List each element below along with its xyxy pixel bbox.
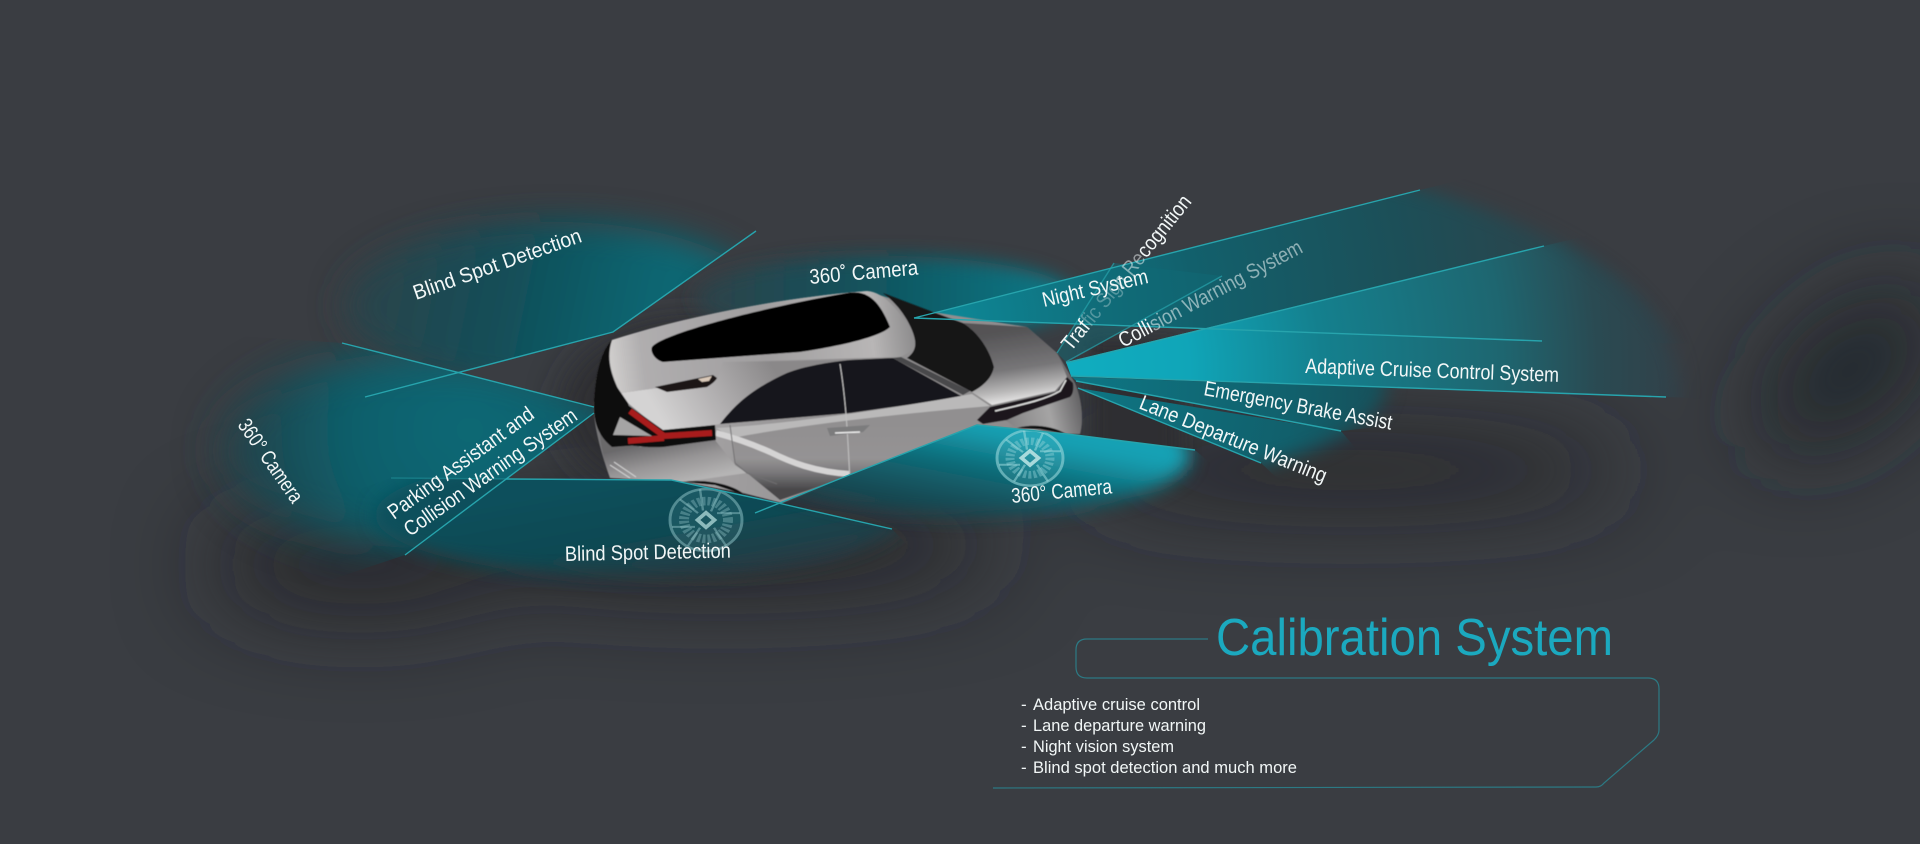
item: lane departure warning: - bbox=[1021, 716, 1027, 735]
item text: adaptive cruise control: Adaptive cruise control bbox=[1033, 695, 1200, 714]
tread ring bbox=[1010, 441, 1050, 475]
wheel disc bbox=[996, 429, 1064, 487]
tail light surround bbox=[608, 403, 716, 447]
front ground shadow bbox=[1090, 340, 1180, 470]
front fender bbox=[1005, 383, 1082, 434]
dark ground under car bbox=[560, 320, 820, 500]
beam: night system bbox=[938, 188, 1556, 328]
label: collision warning rear: Collision Warning System bbox=[400, 404, 582, 541]
label: 360 camera front: 360° Camera bbox=[1010, 475, 1113, 508]
rear dark edge bbox=[594, 340, 640, 447]
car body bbox=[594, 291, 1082, 503]
beam: lower blind spot detection bbox=[377, 478, 896, 584]
roof pillar strip bbox=[893, 357, 970, 395]
headlight highlight bbox=[995, 380, 1066, 411]
beam: lane departure warning bbox=[1081, 388, 1348, 472]
rear wheel arch bbox=[683, 481, 745, 495]
door line bbox=[840, 364, 850, 482]
feature list bbox=[1021, 695, 1297, 777]
beam: right 360 camera bbox=[782, 426, 1201, 526]
spoiler highlight bbox=[698, 376, 712, 382]
item: night vision system: - bbox=[1021, 737, 1027, 756]
beam: traffic sign recognition bbox=[1058, 263, 1129, 362]
hood bbox=[963, 323, 1067, 405]
windscreen bbox=[883, 293, 994, 392]
label: blind spot detection upper: Blind Spot Detection bbox=[410, 225, 585, 305]
label: 360 camera rear: 360° Camera bbox=[233, 415, 308, 508]
title: Calibration System bbox=[1216, 609, 1613, 667]
rim bbox=[670, 489, 742, 551]
front wheel bbox=[996, 429, 1064, 487]
sill highlight bbox=[716, 394, 990, 438]
rear bumper bbox=[600, 432, 747, 482]
item text: night vision system: Night vision system bbox=[1033, 737, 1174, 756]
rear window bbox=[652, 292, 890, 362]
roof and hatch panel bbox=[610, 291, 915, 393]
calibration frame bbox=[993, 639, 1659, 788]
background shadows bbox=[210, 261, 1920, 610]
side windows bbox=[720, 358, 963, 424]
door panel bbox=[733, 405, 985, 500]
label: 360 camera top: 360˚ Camera bbox=[808, 257, 919, 289]
tread ring bbox=[684, 501, 728, 539]
hub bbox=[698, 513, 714, 527]
beam boundary lines bbox=[342, 190, 1666, 555]
door handle bbox=[827, 425, 870, 436]
label: lane departure warning: Lane Departure Warning bbox=[1136, 391, 1330, 488]
label: blind spot detection lower: Blind Spot Detection bbox=[565, 540, 731, 566]
door seam bbox=[730, 425, 777, 484]
beam: 360 camera rear bbox=[220, 352, 630, 548]
spokes bbox=[999, 430, 1061, 482]
label: traffic sign recognition: Traffic Sign Recognition bbox=[1057, 191, 1196, 355]
beam: upper blind spot detection bbox=[343, 222, 767, 390]
hub bbox=[1022, 451, 1038, 465]
item: adaptive cruise control: - bbox=[1021, 695, 1027, 714]
handle chrome bbox=[835, 432, 860, 433]
item text: blind spot detection: Blind spot detection and much more bbox=[1033, 758, 1297, 777]
rear spoiler bbox=[655, 375, 717, 392]
label: adaptive cruise control: Adaptive Cruise Control System bbox=[1305, 355, 1559, 387]
beam: emergency brake assist bbox=[1072, 377, 1392, 431]
item text: lane departure warning: Lane departure warning bbox=[1033, 716, 1206, 735]
label: collision warning front: Collision Warning System bbox=[1115, 236, 1306, 352]
beam: top 360 camera bbox=[695, 256, 1075, 340]
front wheel arch bbox=[1017, 426, 1066, 434]
rear wheel bbox=[669, 488, 743, 552]
label: night system: Night System bbox=[1040, 265, 1150, 312]
rim bbox=[997, 430, 1063, 486]
item: blind spot detection: - bbox=[1021, 758, 1027, 777]
infographic canvas bbox=[200, 188, 1920, 789]
rear bumper lines bbox=[610, 462, 636, 478]
car bbox=[594, 291, 1082, 503]
headlight bbox=[977, 377, 1073, 424]
wheel disc bbox=[669, 488, 743, 552]
rear deck bbox=[620, 360, 850, 432]
spokes bbox=[672, 489, 740, 546]
tail light lens bbox=[613, 417, 652, 436]
beam: adaptive cruise control bbox=[1066, 242, 1671, 397]
label: parking assistant: Parking Assistant and bbox=[383, 403, 539, 524]
label: emergency brake assist: Emergency Brake Assist bbox=[1202, 377, 1394, 435]
tail light bbox=[628, 411, 712, 441]
body swoosh bbox=[716, 433, 850, 474]
